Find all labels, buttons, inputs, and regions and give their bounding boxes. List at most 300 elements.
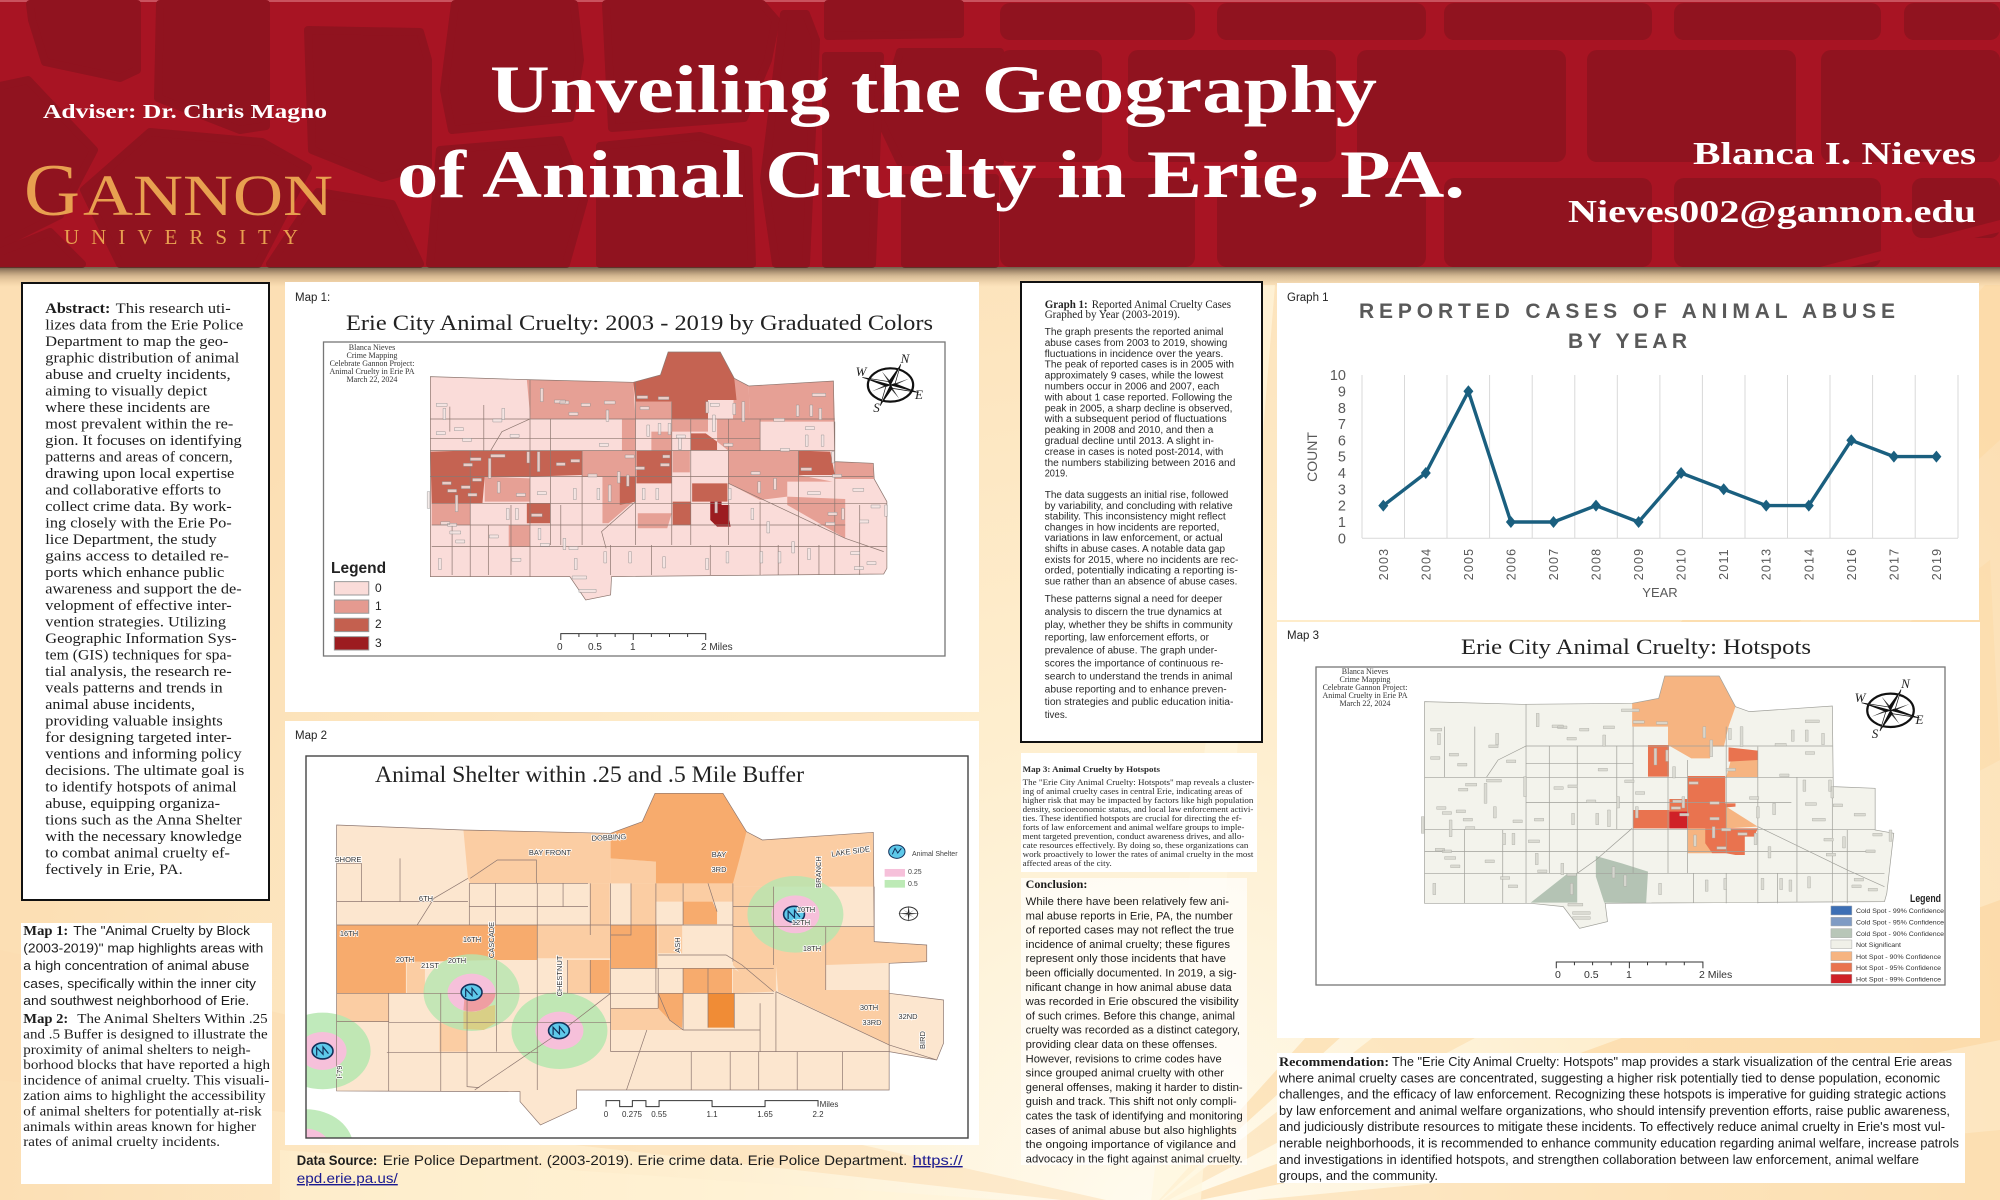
- graph paragraph 2: orded, potentially indicating a reporting is-: [1045, 566, 1238, 577]
- y axis labels: 1: [1338, 515, 1346, 531]
- panel: abstract: aiming to visually depict: [45, 384, 208, 400]
- graph paragraph 2: variations in law enforcement, or actual: [1045, 533, 1223, 544]
- map 2 street names: CHESTNUT: [555, 955, 564, 996]
- graph heading: Reported Animal Cruelty Cases: [1092, 299, 1231, 311]
- header shadow: [0, 267, 2000, 287]
- graph paragraph 3: These patterns signal a need for deeper: [1045, 594, 1223, 605]
- text: map 1 description: a high concentration of animal abuse: [23, 958, 249, 973]
- panel: abstract: velopment of effective inter-: [45, 598, 232, 614]
- y axis labels: 6: [1338, 433, 1346, 449]
- panel: map 3 description: ing of animal cruelty cases in central Erie, indicating areas of: [1023, 786, 1242, 796]
- x axis labels: 2009: [1632, 548, 1646, 580]
- graph heading: Graphed by Year (2003-2019).: [1045, 309, 1180, 321]
- graph paragraph 1: with a subsequent period of fluctuations: [1044, 414, 1227, 425]
- panel: conclusion: cruelty was recorded as a distinct category,: [1026, 1025, 1240, 1037]
- text: map 2 description: animals within areas known for higher: [23, 1120, 256, 1135]
- x axis labels: 2017: [1887, 548, 1901, 580]
- panel: abstract: graphic distribution of animal: [45, 350, 239, 366]
- x axis title: YEAR: [1642, 585, 1678, 600]
- map 2 scale labels: [604, 1100, 838, 1119]
- text: map 2 description: proximity of animal shelters to neigh-: [23, 1043, 251, 1058]
- panel: abstract: collect crime data. By work-: [45, 499, 232, 515]
- panel: recommendation: [1277, 1053, 1965, 1183]
- panel: recommendation: The "Erie City Animal Cruelty: Hotspots" map provides a stark visualization of the central Erie areas: [1392, 1055, 1952, 1069]
- x axis labels: 2019: [1930, 548, 1944, 580]
- title: of Animal Cruelty in Erie, PA.: [397, 136, 1465, 212]
- panel: map descriptions: [21, 923, 272, 1184]
- map 2 street names: [335, 832, 927, 1078]
- map 1 legend text: 3: [375, 636, 382, 650]
- panel: abstract: with the necessary knowledge: [45, 829, 242, 845]
- panel: abstract: and collaborative efforts to: [45, 482, 221, 498]
- y axis labels: 4: [1338, 466, 1346, 482]
- map 3 credit: Celebrate Gannon Project:: [1323, 683, 1407, 692]
- logo: Gannon University: [24, 150, 333, 249]
- map 3 title: Erie City Animal Cruelty: Hotspots: [1461, 634, 1811, 659]
- map 2 scale labels: 0.55: [651, 1110, 667, 1119]
- x axis labels: 2007: [1547, 548, 1561, 580]
- map 3 legend swatches: [1831, 906, 1852, 983]
- graph paragraph 3: scores the importance of continuous re-: [1045, 658, 1223, 670]
- panel: abstract: to combat animal cruelty ef-: [45, 846, 230, 862]
- graph paragraph 1: [1044, 327, 1235, 480]
- chart gridlines: [1362, 375, 1958, 538]
- map 2 scale labels: 1.1: [706, 1110, 718, 1119]
- map 2 street names: BIRD: [918, 1030, 927, 1049]
- text: map 2 description: zation aims to highlight the accessibility: [23, 1089, 266, 1104]
- map 1 legend text: 1: [375, 599, 382, 613]
- text: map 2 description: of animal shelters for potentially at-risk: [23, 1104, 262, 1119]
- panel: recommendation: Recommendation:: [1279, 1055, 1389, 1069]
- map 2 frame outline: [306, 756, 968, 1138]
- map 3 compass letters: [1855, 676, 1924, 741]
- y axis labels: 3: [1338, 482, 1346, 498]
- text: map 1 description: cases, specifically within the inner city: [23, 976, 257, 991]
- map 2 choropleth with buffers: [258, 793, 943, 1186]
- author: Nieves002@gannon.edu: [1568, 193, 1976, 229]
- map 3 scale labels: 2 Miles: [1699, 969, 1732, 981]
- panel: conclusion: providing clear data on these offenses.: [1026, 1039, 1217, 1051]
- map 2 street names: BAY FRONT: [529, 848, 572, 857]
- panel: abstract: gion. It focuses on identifying: [45, 433, 242, 449]
- map 3 street tags: [1421, 709, 1892, 919]
- panel: abstract: to identify hotspots of animal: [45, 780, 237, 796]
- panel: graph 1: [1277, 283, 1979, 620]
- map 1 credit: Celebrate Gannon Project:: [330, 359, 414, 368]
- map 3 credit: Blanca Nieves: [1342, 667, 1388, 676]
- panel: abstract: Geographic Information Sys-: [45, 631, 237, 647]
- text: map 2 description: rates of animal cruelty incidents.: [23, 1135, 220, 1150]
- map 3 caption: Map 3: [1287, 630, 1319, 642]
- map 1 scale labels: 2 Miles: [701, 642, 733, 653]
- shelter icons: [312, 906, 804, 1059]
- map 2 scale labels: Miles: [820, 1100, 838, 1109]
- graph paragraph 2: exists for 2015, where no incidents are rec-: [1045, 555, 1238, 566]
- map 1 scale bar: [561, 634, 706, 640]
- map 3 legend text: Hot Spot - 95% Confidence: [1856, 965, 1941, 972]
- graph title: [1359, 300, 1895, 353]
- map 2 street names: ASH: [673, 937, 682, 953]
- panel: abstract: ports which enhance public: [45, 565, 225, 581]
- panel: map 3 description: Map 3: Animal Cruelty by Hotspots: [1023, 764, 1161, 774]
- map 1 legend text: 0: [375, 581, 382, 595]
- y axis labels: 7: [1338, 417, 1346, 433]
- map 1 caption: Map 1:: [295, 292, 330, 304]
- y axis labels: [1330, 368, 1346, 547]
- x axis labels: [1377, 548, 1944, 580]
- panel: recommendation: nerable neighborhoods, it is recommended to enhance community education regarding animal welfare, increase patrols: [1279, 1136, 1959, 1150]
- text: map 2 description: and .5 Buffer is designed to illustrate the: [23, 1027, 268, 1042]
- map 2 street names: 33RD: [862, 1018, 882, 1027]
- panel: conclusion: While there have been relatively few ani-: [1026, 896, 1229, 908]
- map 2 street names: 18TH: [803, 944, 821, 953]
- panel: abstract: for designing targeted inter-: [45, 730, 232, 746]
- map 2 street names: 12TH: [792, 918, 810, 927]
- map 2 street names: 3RD: [711, 865, 727, 874]
- panel: map 1: [285, 282, 979, 712]
- map 1 scale labels: [557, 642, 733, 653]
- text: map 1 description: The "Animal Cruelty by Block: [73, 923, 251, 938]
- panel: conclusion: Conclusion:: [1026, 879, 1087, 891]
- map 1 street lines: [430, 352, 887, 600]
- text: map 1 description: and southwest neighborhood of Erie.: [23, 993, 249, 1008]
- panel: conclusion: incidence of animal cruelty; these figures: [1026, 939, 1231, 951]
- map 1 credit: [329, 343, 415, 384]
- map 3 compass letters: E: [1915, 712, 1924, 727]
- graph paragraph 1: abuse cases from 2003 to 2019, showing: [1045, 338, 1227, 349]
- map 2 street names: 6TH: [419, 894, 433, 903]
- panel: map 3 description: [1021, 753, 1257, 872]
- map 2 street names: LAKE SIDE: [831, 844, 870, 859]
- map 2 legend text: [908, 851, 958, 888]
- logo: Gannon University: ANNON: [83, 163, 333, 228]
- map 3 scale labels: 0.5: [1584, 969, 1599, 981]
- map 3 scale bar: [1556, 962, 1703, 968]
- map 3 legend text: Hot Spot - 99% Confidence: [1856, 977, 1941, 984]
- map 3 compass: [1851, 682, 1930, 739]
- graph paragraph 1: the numbers stabilizing between 2016 and: [1045, 458, 1235, 469]
- map 2 street names: 16TH: [340, 929, 358, 938]
- x axis labels: 2016: [1845, 548, 1859, 580]
- map 2 street names: 32ND: [898, 1012, 918, 1021]
- data source: https://: [913, 1152, 963, 1168]
- panel: abstract: ing closely with the Erie Po-: [45, 516, 232, 532]
- panel: abstract: decisions. The ultimate goal is: [45, 763, 244, 779]
- graph paragraph 1: approximately 9 cases, while the lowest: [1045, 371, 1224, 382]
- panel: conclusion: advocacy in the fight against animal cruelty.: [1026, 1153, 1243, 1165]
- map 2 street names: 16TH: [463, 935, 481, 944]
- panel: map 3 description: higher risk that may be impacted by factors like high population: [1023, 795, 1254, 805]
- map 1 credit: Animal Cruelty in Erie PA: [329, 367, 415, 376]
- map 2 scale labels: 0: [604, 1110, 609, 1119]
- panel: conclusion: nificant change in how animal abuse data: [1026, 982, 1233, 994]
- graph paragraph 3: search to understand the trends in animal: [1045, 671, 1232, 682]
- map 1 street tags: [427, 388, 887, 592]
- map 3 street lines: [1425, 676, 1894, 928]
- panel: conclusion: of such crimes. Before this change, animal: [1026, 1010, 1235, 1022]
- graph paragraph 1: numbers occur in 2006 and 2007, each: [1045, 382, 1219, 392]
- map 3 legend text: Cold Spot - 90% Confidence: [1856, 931, 1944, 938]
- map 1 compass letters: [856, 351, 923, 415]
- text: map 1 description: (2003-2019)" map highlights areas with: [23, 940, 263, 956]
- map 3 scale labels: 1: [1626, 969, 1632, 981]
- header lattice pattern: [0, 4, 1000, 264]
- graph paragraph 1: peaking in 2008 and 2010, and then a: [1045, 425, 1214, 436]
- map 3 legend text: Cold Spot - 95% Confidence: [1856, 920, 1944, 927]
- map 2 street lines: [337, 793, 943, 1125]
- panel: recommendation: and investigations in identified hotspots, and strengthen collaboration between law enforcement, animal welfare: [1279, 1153, 1919, 1167]
- title: [397, 51, 1465, 212]
- map 3 legend text: Cold Spot - 99% Confidence: [1856, 908, 1944, 915]
- panel: recommendation: by law enforcement and animal welfare organizations, who should intensify prevention efforts, raise public awareness,: [1279, 1104, 1950, 1118]
- panel: conclusion: represent only those incidents that have: [1026, 953, 1226, 965]
- map 1 credit: Blanca Nieves: [349, 343, 395, 352]
- panel: map 3 description: ment targeted prevention, conduct awareness drives, and allo-: [1023, 831, 1244, 841]
- text: map 2 description: [23, 1012, 270, 1150]
- panel: conclusion: since grouped animal cruelty with other: [1026, 1068, 1224, 1080]
- panel: abstract: gains access to detailed re-: [45, 548, 229, 564]
- panel: abstract: tem (GIS) techniques for spa-: [45, 648, 232, 664]
- graph paragraph 3: reporting, law enforcement efforts, or: [1045, 633, 1210, 644]
- author: Blanca I. Nieves: [1693, 135, 1976, 171]
- map 1 frame: [324, 342, 945, 656]
- text: map 1 description: Map 1:: [23, 924, 68, 939]
- panel: conclusion: the ongoing importance of vigilance and: [1026, 1139, 1236, 1151]
- panel: abstract: fectively in Erie, PA.: [45, 862, 183, 878]
- map 3 credit: [1322, 667, 1408, 708]
- map 3 legend text: Legend: [1910, 893, 1941, 905]
- map 2 compass: [898, 906, 919, 922]
- map 2 street names: CASCADE: [487, 922, 496, 958]
- map 1 choropleth: [334, 352, 929, 650]
- data source: epd.erie.pa.us/: [297, 1170, 398, 1186]
- panel: abstract: lice Department, the study: [45, 532, 217, 548]
- x axis labels: 2013: [1760, 548, 1774, 580]
- panel: abstract: Abstract:: [45, 301, 110, 317]
- graph title: REPORTED CASES OF ANIMAL ABUSE: [1359, 300, 1895, 323]
- graph paragraph 2: stability. This inconsistency might reflect: [1045, 512, 1226, 523]
- map 2 scale bar: [606, 1101, 818, 1107]
- map 1 credit: March 22, 2024: [347, 375, 397, 384]
- map 2 street names: 30TH: [860, 1003, 878, 1012]
- panel: abstract: tial analysis, the research re-: [45, 664, 232, 680]
- graph paragraph 3: play, whether they be shifts in community: [1045, 620, 1233, 631]
- graph paragraph 2: sue rather than an absence of abuse cases.: [1045, 576, 1237, 587]
- panel: map 3 description: cate resources effectively. By doing so, these organizations can: [1023, 840, 1249, 850]
- graph paragraph 1: fluctuations in incidence over the years.: [1045, 349, 1223, 360]
- x axis labels: 2003: [1377, 548, 1391, 580]
- map 2 scale labels: 1.65: [757, 1110, 773, 1119]
- graph title: BY YEAR: [1568, 330, 1687, 353]
- map 3 legend text: Not Significant: [1856, 942, 1901, 949]
- text: map 2 description: The Animal Shelters Within .25: [77, 1012, 268, 1027]
- map 3 legend text: [1856, 893, 1944, 984]
- y axis labels: 8: [1338, 401, 1346, 417]
- data source: Data Source:: [297, 1152, 377, 1168]
- y axis labels: 2: [1338, 499, 1346, 515]
- graph paragraph 3: abuse reporting and to enhance preven-: [1045, 684, 1227, 695]
- map 2 legend text: 0.25: [908, 869, 922, 876]
- map 1 legend text: Legend: [331, 560, 386, 577]
- data source: [297, 1152, 963, 1186]
- x axis labels: 2004: [1419, 548, 1433, 580]
- panel: conclusion: was recorded in Erie obscured the visibility: [1025, 996, 1239, 1008]
- map 1 title: Erie City Animal Cruelty: 2003 - 2019 by Graduated Colors: [346, 310, 933, 335]
- panel: recommendation: challenges, and the efficacy of law enforcement. Recognizing these hotspots is imperative for guiding strategic actions: [1279, 1088, 1946, 1102]
- map 1 compass letters: N: [900, 351, 911, 366]
- map 3 compass letters: N: [1900, 676, 1911, 691]
- panel: conclusion: However, revisions to crime codes have: [1026, 1053, 1222, 1065]
- panel: conclusion: cases of animal abuse but also highlights: [1026, 1125, 1237, 1137]
- panel: abstract: This research uti-: [116, 301, 231, 317]
- panel: abstract: where these incidents are: [45, 400, 210, 416]
- map 2 street names: 20TH: [396, 955, 414, 964]
- map 2 scale labels: 2.2: [812, 1110, 824, 1119]
- map 3 hotspot map: [1421, 676, 1930, 983]
- panel: recommendation: and judiciously distribute resources to mitigate these incidents. To effectively reduce animal cruelty in Erie's most vul-: [1279, 1120, 1945, 1134]
- map 3 credit: March 22, 2024: [1340, 699, 1390, 708]
- map 2 street names: BRANCH: [814, 856, 823, 888]
- panel: graph description: [1021, 282, 1262, 742]
- panel: abstract: ventions and informing policy: [45, 746, 242, 762]
- panel: map 3 description: density, socioeconomic status, and local law enforcement activi-: [1023, 804, 1253, 814]
- y axis labels: 10: [1330, 368, 1346, 384]
- map 2 street names: 20TH: [448, 956, 466, 965]
- graph paragraph 3: prevalence of abuse. The graph under-: [1045, 646, 1217, 657]
- author: [1568, 135, 1976, 229]
- map 1 compass letters: W: [856, 364, 868, 379]
- x axis labels: 2014: [1802, 548, 1816, 580]
- panel: map 3: [1277, 622, 1980, 1038]
- map 3 credit: Crime Mapping: [1340, 675, 1390, 684]
- map 2 scale labels: 0.275: [622, 1110, 643, 1119]
- panel: map 2: [285, 721, 979, 1145]
- x axis labels: 2011: [1717, 548, 1731, 580]
- panel: abstract: veals patterns and trends in: [45, 680, 223, 696]
- map 3 compass letters: S: [1872, 726, 1879, 741]
- y axis title: COUNT: [1304, 432, 1320, 482]
- panel: abstract: providing valuable insights: [45, 714, 223, 730]
- graph paragraph 1: with about 1 case reported. Following the: [1044, 392, 1233, 403]
- panel: abstract: Department to map the geo-: [45, 334, 228, 350]
- graph paragraph 1: The peak of reported cases is in 2005 with: [1045, 360, 1234, 371]
- map 2 street names: 21ST: [421, 961, 439, 970]
- logo: Gannon University: G: [24, 150, 80, 232]
- y axis labels: 0: [1338, 531, 1346, 547]
- panel: abstract: [22, 283, 269, 900]
- x axis labels: 2006: [1504, 548, 1518, 580]
- graph paragraph 3: tion strategies and public education initia-: [1045, 697, 1233, 708]
- text: map 2 description: incidence of animal cruelty. This visuali-: [23, 1074, 270, 1089]
- text: map 2 description: borhood blocks that have reported a high: [23, 1058, 270, 1073]
- graph heading: Graph 1:: [1045, 299, 1088, 311]
- map 1 compass letters: E: [914, 387, 923, 402]
- shelter buffers: [258, 876, 843, 1186]
- map 3 credit: Animal Cruelty in Erie PA: [1322, 691, 1408, 700]
- panel: abstract: drawing upon local expertise: [45, 466, 235, 482]
- graph paragraph 2: The data suggests an initial rise, followed: [1045, 490, 1228, 501]
- map 2 legend text: Animal Shelter: [912, 851, 958, 858]
- adviser: Adviser: Dr. Chris Magno: [43, 101, 327, 123]
- panel: abstract: tions such as the Anna Shelter: [45, 812, 242, 828]
- panel: abstract: patterns and areas of concern,: [45, 450, 233, 466]
- panel: conclusion: mal abuse reports in Erie, PA, the number: [1026, 910, 1233, 922]
- panel: abstract: lizes data from the Erie Police: [45, 318, 244, 334]
- graph paragraph 1: gradual decline until 2013. A slight in-: [1045, 436, 1214, 447]
- map 1 compass letters: S: [873, 400, 880, 415]
- map 2 street names: SHORE: [335, 855, 361, 864]
- panel: abstract: abuse, equipping organiza-: [45, 796, 220, 812]
- map 1 legend swatches: [334, 582, 369, 650]
- map 1 scale labels: 1: [630, 642, 636, 653]
- panel: map 3 description: ties. These identified hotspots are crucial for directing the ef-: [1023, 813, 1242, 823]
- panel: abstract: most prevalent within the re-: [45, 416, 233, 432]
- map 1 legend text: 2: [375, 617, 382, 631]
- graph paragraph 2: by variability, and concluding with relative: [1045, 501, 1233, 512]
- map 1 compass: [852, 357, 929, 413]
- panel: abstract: awareness and support the de-: [45, 582, 242, 598]
- graph paragraph 1: peak in 2005, a sharp decline is observed,: [1045, 403, 1232, 414]
- map 3 scale labels: 0: [1555, 969, 1561, 981]
- panel: conclusion: been officially documented. In 2019, a sig-: [1026, 968, 1237, 980]
- line chart: reported cases by year: [1378, 385, 1941, 528]
- map 1 legend text: [331, 560, 386, 650]
- map 2 street names: DOBBING: [591, 832, 627, 843]
- panel: map 3 description: forts of law enforcement and animal welfare groups to imple-: [1023, 822, 1244, 832]
- data source: Erie Police Department. (2003-2019). Erie crime data. Erie Police Department.: [383, 1152, 907, 1168]
- panel: conclusion: [1021, 878, 1247, 1165]
- map 2 street names: BAY: [712, 850, 726, 859]
- graph heading: [1045, 299, 1231, 321]
- panel: map 3 description: work proactively to lower the rates of animal cruelty in the most: [1023, 849, 1254, 859]
- panel: abstract: vention strategies. Utilizing: [45, 614, 227, 630]
- map 2 title: Animal Shelter within .25 and .5 Mile Buffer: [375, 762, 804, 787]
- graph paragraph 1: 2019.: [1045, 469, 1068, 480]
- header banner: [0, 0, 2000, 267]
- map 2 legend swatches: [885, 845, 905, 888]
- panel: map 3 description: The "Erie City Animal Cruelty: Hotspots" map reveals a cluster-: [1023, 777, 1254, 787]
- graph paragraph 3: analysis to discern the true dynamics at: [1045, 607, 1222, 618]
- x axis labels: 2005: [1462, 548, 1476, 580]
- graph paragraph 1: crease in cases is noted post-2014, with: [1045, 447, 1223, 458]
- x axis labels: 2008: [1590, 548, 1604, 580]
- panel: conclusion: general offenses, making it harder to distin-: [1026, 1082, 1243, 1094]
- title: Unveiling the Geography: [490, 51, 1377, 127]
- map 2 caption: Map 2: [295, 730, 327, 742]
- panel: conclusion: cates the task of identifying and monitoring: [1026, 1110, 1243, 1122]
- panel: abstract: animal abuse incidents,: [45, 697, 195, 713]
- map 3 compass letters: W: [1855, 690, 1867, 705]
- graph paragraph 3: [1045, 594, 1233, 721]
- map 3 frame: [1316, 667, 1945, 985]
- panel: recommendation: groups, and the community.: [1279, 1169, 1438, 1183]
- graph caption: Graph 1: [1287, 292, 1329, 304]
- map 1 scale labels: 0.5: [588, 642, 602, 653]
- panel: conclusion: guish and track. This shift not only compli-: [1026, 1096, 1237, 1108]
- graph paragraph 1: The graph presents the reported animal: [1045, 327, 1223, 338]
- graph paragraph 2: [1045, 490, 1238, 587]
- text: map 1 description: [23, 923, 263, 1008]
- graph paragraph 2: shifts in abuse cases. A notable data gap: [1045, 544, 1225, 555]
- map 3 legend text: Hot Spot - 90% Confidence: [1856, 954, 1941, 961]
- text: map 2 description: Map 2:: [23, 1012, 68, 1027]
- y axis labels: 9: [1338, 385, 1346, 401]
- map 1 scale labels: 0: [557, 642, 563, 653]
- panel: abstract: abuse and cruelty incidents,: [45, 367, 231, 383]
- graph paragraph 3: tives.: [1045, 710, 1067, 721]
- graph paragraph 2: changes in how incidents are reported,: [1045, 522, 1219, 533]
- y axis labels: 5: [1338, 450, 1346, 466]
